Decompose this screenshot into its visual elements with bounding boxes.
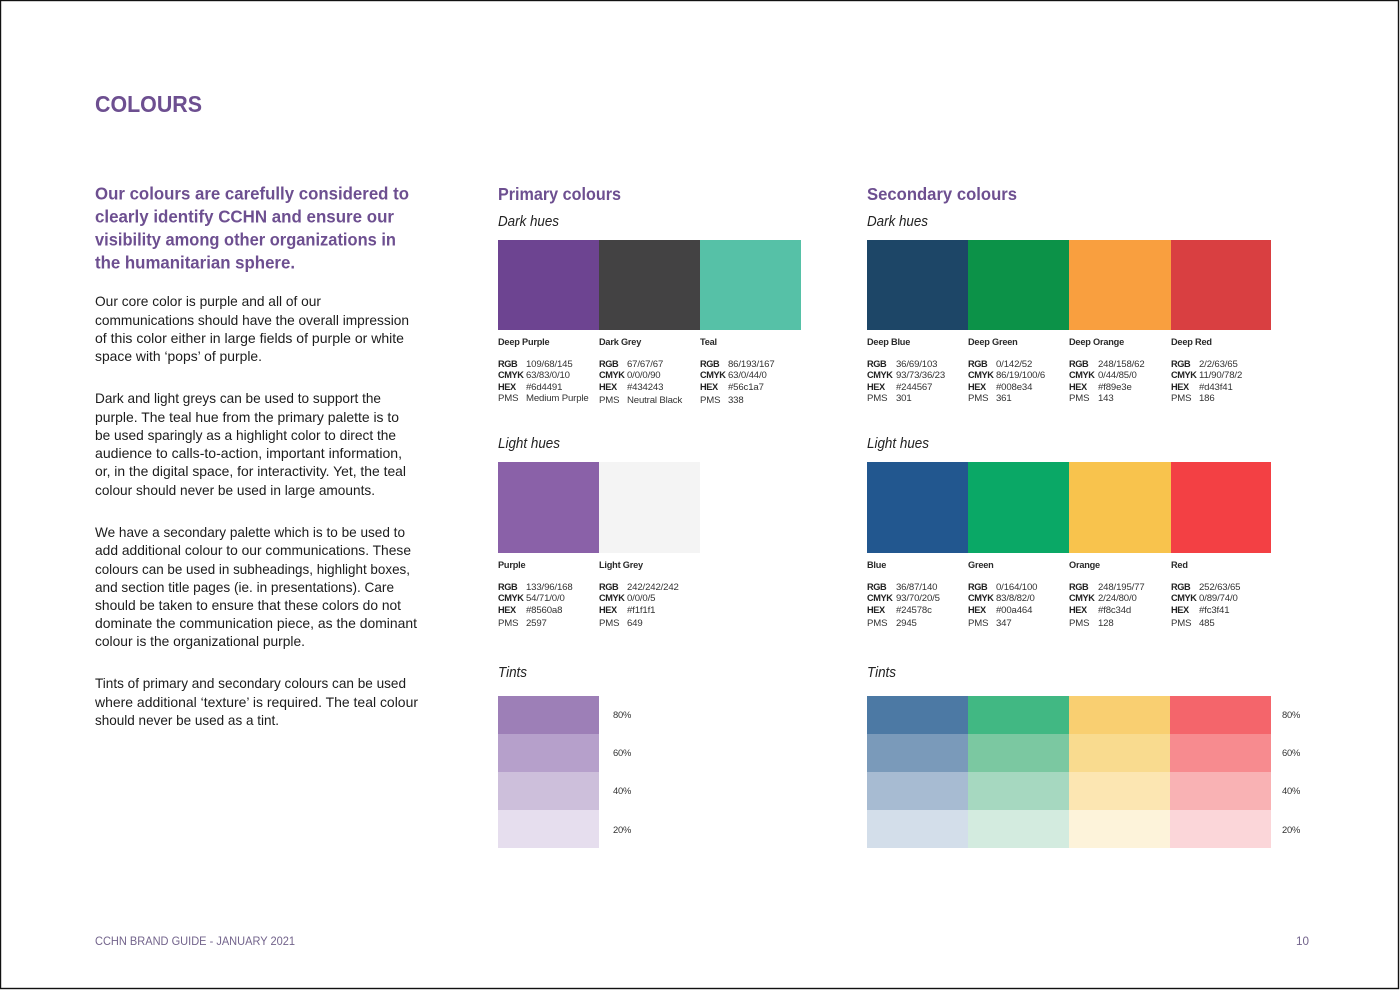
specs: blue: HEX <box>867 605 886 615</box>
specs: purple: RGB <box>498 582 518 592</box>
heading: secondary colours: Secondary colours <box>867 184 1017 204</box>
tint percent labels: secondary <box>1282 709 1300 835</box>
heading: primary colours: Primary colours <box>498 184 621 204</box>
specs: deep orange: PMS <box>1069 393 1089 404</box>
text block: secondary palette: should be taken to ensure that these colors do not <box>95 597 401 613</box>
text block: secondary palette: colours can be used in subheadings, highlight boxes, <box>95 561 410 577</box>
text block: tints: where additional ‘texture’ is required. The teal colour <box>94 694 418 710</box>
lead paragraph: visibility among other organizations in <box>95 230 396 250</box>
specs: dark grey: #434243 <box>627 382 663 393</box>
specs: deep blue: 36/69/103 <box>896 359 937 370</box>
specs: orange <box>1069 560 1145 629</box>
specs: red: PMS <box>1171 618 1191 629</box>
specs: teal: RGB <box>700 359 720 369</box>
specs: red: 0/89/74/0 <box>1199 593 1238 604</box>
tint percent labels: primary: 60% <box>613 747 631 758</box>
specs: green: 347 <box>996 618 1012 629</box>
specs: green: RGB <box>968 582 988 592</box>
lead paragraph: the humanitarian sphere. <box>95 252 295 272</box>
text block: core color: of this color either in large fields of purple or white <box>95 330 404 346</box>
swatches: primary tints <box>498 696 599 848</box>
specs: light grey: PMS <box>599 618 619 629</box>
footer: page number: 10 <box>1296 934 1309 948</box>
specs: light grey: RGB <box>599 582 619 592</box>
specs: dark grey: Dark Grey <box>599 337 642 347</box>
specs: deep red: Deep Red <box>1171 337 1212 347</box>
text block: greys and teal: or, in the digital space, for interactivity. Yet, the teal <box>95 463 406 479</box>
specs: green: CMYK <box>968 593 994 603</box>
specs: purple: 54/71/0/0 <box>526 593 565 604</box>
swatches: primary light hues <box>498 462 700 553</box>
text block: secondary palette: dominate the communication piece, as the dominant <box>95 615 417 631</box>
text block: tints: should never be used as a tint. <box>95 712 279 728</box>
specs: deep purple: RGB <box>498 359 518 369</box>
specs: deep green: #008e34 <box>996 382 1033 393</box>
specs: blue: 36/87/140 <box>896 582 937 593</box>
footer: guide name: CCHN BRAND GUIDE - JANUARY 2021 <box>95 934 295 948</box>
specs: deep red: HEX <box>1171 382 1190 392</box>
specs: teal: HEX <box>700 382 719 392</box>
specs: deep purple: HEX <box>498 382 517 392</box>
specs: green: 83/8/82/0 <box>996 593 1035 604</box>
specs: orange: 248/195/77 <box>1098 582 1145 593</box>
specs: deep green: Deep Green <box>968 337 1018 347</box>
specs: deep orange: CMYK <box>1069 370 1095 380</box>
specs: blue: CMYK <box>867 593 893 603</box>
specs: red: 252/63/65 <box>1199 582 1240 593</box>
tint percent labels: secondary: 80% <box>1282 709 1300 720</box>
specs: deep red: 11/90/78/2 <box>1199 370 1242 381</box>
specs: deep red: RGB <box>1171 359 1191 369</box>
specs: purple: PMS <box>498 618 518 629</box>
specs: red: CMYK <box>1171 593 1197 603</box>
tint percent labels: primary <box>613 709 631 835</box>
specs: deep green: 0/142/52 <box>996 359 1032 370</box>
specs: red: RGB <box>1171 582 1191 592</box>
specs: teal <box>700 337 775 406</box>
tint percent labels: secondary: 20% <box>1282 824 1300 835</box>
specs: deep orange: HEX <box>1069 382 1088 392</box>
tint percent labels: secondary: 60% <box>1282 747 1300 758</box>
subheading: secondary tints: Tints <box>867 665 896 681</box>
specs: deep red <box>1171 337 1242 404</box>
specs: light grey: Light Grey <box>599 560 644 570</box>
specs: deep purple: 63/83/0/10 <box>526 370 570 381</box>
specs: deep red: #d43f41 <box>1199 382 1233 393</box>
specs: light grey: 242/242/242 <box>627 582 679 593</box>
specs: red: HEX <box>1171 605 1190 615</box>
specs: orange: HEX <box>1069 605 1088 615</box>
specs: dark grey: 67/67/67 <box>627 359 663 370</box>
specs: deep green: HEX <box>968 382 987 392</box>
specs: blue: 93/70/20/5 <box>896 593 940 604</box>
specs: light grey: 0/0/0/5 <box>627 593 655 604</box>
specs: purple: CMYK <box>498 593 524 603</box>
text block: greys and teal: audience to calls-to-action, important information, <box>95 445 402 461</box>
specs: green <box>968 560 1037 629</box>
text block: secondary palette: and section title pages (ie. in presentations). Care <box>95 579 394 595</box>
specs: dark grey: HEX <box>599 382 618 392</box>
specs: deep red: CMYK <box>1171 370 1197 380</box>
specs: purple: 2597 <box>526 618 547 629</box>
specs: dark grey: Neutral Black <box>627 395 682 406</box>
specs: deep purple: PMS <box>498 393 518 404</box>
specs: teal: 86/193/167 <box>728 359 775 370</box>
specs: blue: PMS <box>867 618 887 629</box>
specs: light grey: HEX <box>599 605 618 615</box>
subheading: primary light hues: Light hues <box>498 436 560 452</box>
specs: deep orange <box>1069 337 1145 404</box>
specs: teal: Teal <box>700 337 717 347</box>
specs: deep blue: RGB <box>867 359 887 369</box>
specs: deep orange: 0/44/85/0 <box>1098 370 1137 381</box>
specs: orange: RGB <box>1069 582 1089 592</box>
text block: core color <box>95 293 409 364</box>
subheading: secondary light hues: Light hues <box>867 436 929 452</box>
specs: light grey: 649 <box>627 618 643 629</box>
swatches: primary dark hues <box>498 240 801 330</box>
specs: deep green: RGB <box>968 359 988 369</box>
specs: deep orange: RGB <box>1069 359 1089 369</box>
text block: greys and teal <box>95 390 406 498</box>
specs: purple: 133/96/168 <box>526 582 573 593</box>
specs: deep purple: 109/68/145 <box>526 359 573 370</box>
text block: greys and teal: colour should never be used in large amounts. <box>95 482 375 498</box>
lead paragraph: clearly identify CCHN and ensure our <box>95 206 394 226</box>
specs: deep red: 2/2/63/65 <box>1199 359 1238 370</box>
specs: light grey: CMYK <box>599 593 625 603</box>
specs: dark grey: 0/0/0/90 <box>627 370 660 381</box>
text block: secondary palette: colour is the organizational purple. <box>95 633 305 649</box>
tint percent labels: secondary: 40% <box>1282 785 1300 796</box>
specs: deep orange: 248/158/62 <box>1098 359 1145 370</box>
tint percent labels: primary: 20% <box>613 824 631 835</box>
specs: deep purple: Deep Purple <box>498 337 549 347</box>
specs: deep blue <box>867 337 945 404</box>
text block: secondary palette: add additional colour to our communications. These <box>95 542 411 558</box>
tint percent labels: primary: 40% <box>613 785 631 796</box>
text block: tints <box>94 675 418 728</box>
specs: green: PMS <box>968 618 988 629</box>
text block: greys and teal: Dark and light greys can be used to support the <box>95 390 381 406</box>
specs: deep purple: #6d4491 <box>526 382 562 393</box>
specs: light grey <box>599 560 679 629</box>
specs: orange: Orange <box>1069 560 1100 570</box>
specs: blue: Blue <box>867 560 886 570</box>
subheading: secondary dark hues: Dark hues <box>867 214 928 230</box>
specs: deep green: 86/19/100/6 <box>996 370 1045 381</box>
specs: purple <box>498 560 573 629</box>
specs: green: Green <box>968 560 994 570</box>
specs: deep green: CMYK <box>968 370 994 380</box>
specs: deep green: 361 <box>996 393 1012 404</box>
specs: orange: 2/24/80/0 <box>1098 593 1137 604</box>
specs: orange: #f8c34d <box>1098 605 1131 616</box>
specs: purple: Purple <box>498 560 525 570</box>
specs: deep green <box>968 337 1045 404</box>
specs: deep orange: 143 <box>1098 393 1114 404</box>
swatches: secondary light hues <box>867 462 1271 553</box>
specs: dark grey <box>599 337 682 406</box>
specs: deep red: 186 <box>1199 393 1215 404</box>
specs: deep green: PMS <box>968 393 988 404</box>
tint percent labels: primary: 80% <box>613 709 631 720</box>
specs: deep blue: PMS <box>867 393 887 404</box>
text block: tints: Tints of primary and secondary colours can be used <box>95 675 406 691</box>
swatches: secondary dark hues <box>867 240 1271 330</box>
text block: secondary palette: We have a secondary palette which is to be used to <box>95 524 405 540</box>
specs: deep orange: #f89e3e <box>1098 382 1132 393</box>
specs: deep purple: CMYK <box>498 370 524 380</box>
specs: orange: PMS <box>1069 618 1089 629</box>
lead paragraph: Our colours are carefully considered to <box>95 184 409 204</box>
specs: light grey: #f1f1f1 <box>627 605 655 616</box>
specs: dark grey: PMS <box>599 395 619 406</box>
panel: primary colours <box>498 184 801 848</box>
title: COLOURS <box>95 91 202 117</box>
specs: red <box>1171 560 1240 629</box>
text block: greys and teal: be used sparingly as a highlight color to direct the <box>95 427 396 443</box>
specs: deep blue: HEX <box>867 382 886 392</box>
text block: secondary palette <box>95 524 417 649</box>
specs: deep blue: #244567 <box>896 382 932 393</box>
specs: blue: 2945 <box>896 618 917 629</box>
specs: deep purple: Medium Purple <box>526 393 589 404</box>
specs: deep red: PMS <box>1171 393 1191 404</box>
specs: blue: #24578c <box>896 605 932 616</box>
specs: deep blue: 301 <box>896 393 912 404</box>
specs: green: 0/164/100 <box>996 582 1037 593</box>
specs: red: Red <box>1171 560 1188 570</box>
specs: dark grey: CMYK <box>599 370 625 380</box>
specs: teal: 63/0/44/0 <box>728 370 767 381</box>
specs: deep purple <box>498 337 589 404</box>
specs: deep blue: 93/73/36/23 <box>896 370 945 381</box>
specs: teal: #56c1a7 <box>728 382 764 393</box>
subheading: primary dark hues: Dark hues <box>498 214 559 230</box>
specs: blue <box>867 560 940 629</box>
subheading: primary tints: Tints <box>498 665 527 681</box>
specs: deep blue: Deep Blue <box>867 337 910 347</box>
specs: teal: 338 <box>728 395 744 406</box>
lead paragraph <box>95 184 409 272</box>
specs: green: HEX <box>968 605 987 615</box>
specs: purple: #8560a8 <box>526 605 562 616</box>
specs: red: #fc3f41 <box>1199 605 1229 616</box>
specs: deep blue: CMYK <box>867 370 893 380</box>
specs: dark grey: RGB <box>599 359 619 369</box>
specs: orange: 128 <box>1098 618 1114 629</box>
text block: core color: space with ‘pops’ of purple. <box>95 348 262 364</box>
text block: core color: Our core color is purple and all of our <box>95 293 321 309</box>
specs: blue: RGB <box>867 582 887 592</box>
specs: green: #00a464 <box>996 605 1033 616</box>
specs: teal: PMS <box>700 395 720 406</box>
specs: teal: CMYK <box>700 370 726 380</box>
specs: orange: CMYK <box>1069 593 1095 603</box>
panel: secondary colours <box>867 184 1300 848</box>
text block: core color: communications should have the overall impression <box>95 312 409 328</box>
text block: greys and teal: purple. The teal hue from the primary palette is to <box>95 409 399 425</box>
specs: red: 485 <box>1199 618 1215 629</box>
specs: purple: HEX <box>498 605 517 615</box>
specs: deep orange: Deep Orange <box>1069 337 1124 347</box>
swatches: secondary tints <box>867 696 1271 848</box>
